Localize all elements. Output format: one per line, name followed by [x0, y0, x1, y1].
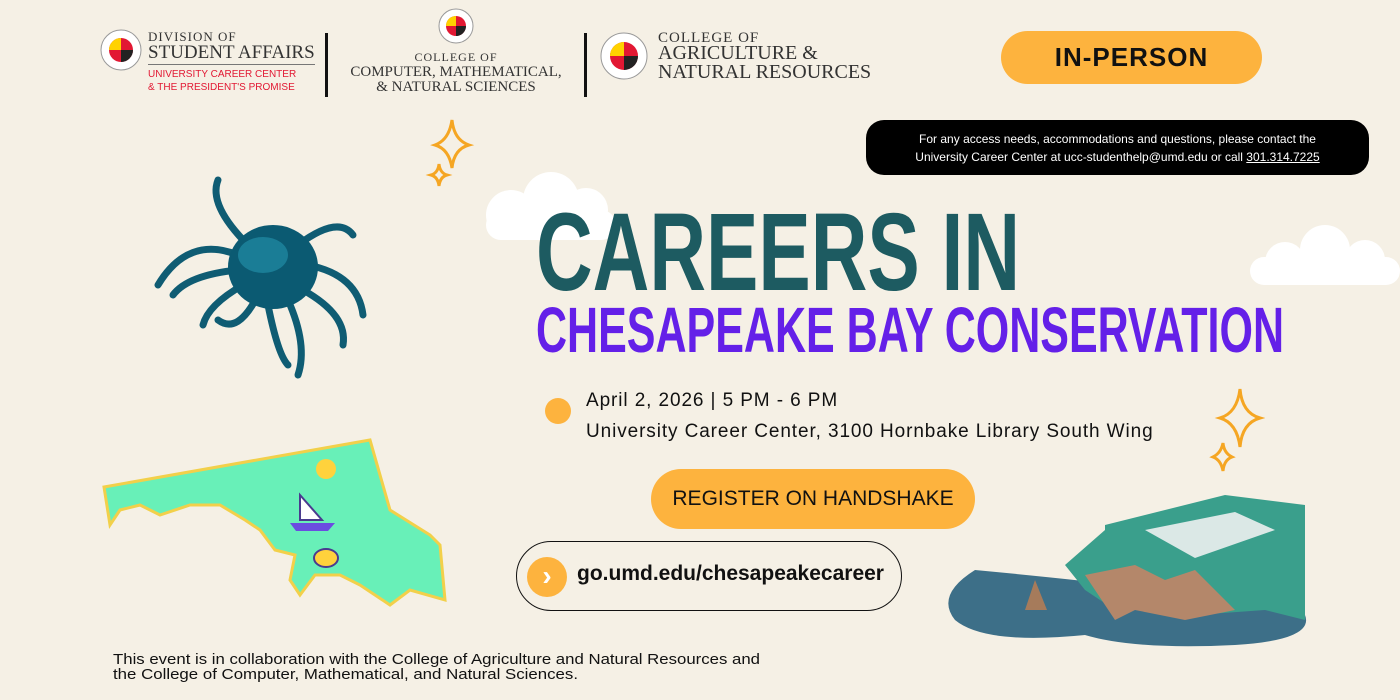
badge: in-person: IN-PERSON [1055, 42, 1208, 72]
logo: division of student affairs: DIVISION OF [148, 29, 237, 44]
icon: orange dot [545, 398, 571, 424]
access info box: University Career Center at ucc-studenthelp@umd.edu or call 301.314.7225 [915, 150, 1320, 164]
access info box: For any access needs, accommodations and questions, please contact the [919, 132, 1316, 146]
logo: college of computer, mathematical & natural sciences: & NATURAL SCIENCES [376, 79, 536, 95]
logo: college of agriculture & natural resources: NATURAL RESOURCES [658, 61, 871, 83]
button: register on handshake: REGISTER ON HANDSHAKE [672, 487, 954, 510]
logo: division of student affairs: UNIVERSITY CAREER CENTER [148, 69, 296, 80]
link pill: go.umd.edu/chesapeakecareer [577, 562, 884, 585]
logo: division of student affairs: & THE PRESIDENT'S PROMISE [148, 82, 295, 93]
illustration: coastal cliff [948, 495, 1306, 646]
button: register on handshake [651, 469, 975, 529]
icon: sparkles top [426, 120, 474, 186]
logo: division of student affairs [100, 29, 315, 93]
event details [586, 390, 1154, 442]
event details: April 2, 2026 | 5 PM - 6 PM [586, 390, 838, 411]
icon: sparkles right [1209, 388, 1265, 472]
icon: arrow circle [527, 557, 567, 597]
event details: University Career Center, 3100 Hornbake Library South Wing [586, 421, 1154, 442]
footer: collaboration note: the College of Computer, Mathematical, and Natural Sciences. [113, 667, 578, 683]
badge: in-person [1001, 31, 1262, 84]
access info box [866, 120, 1369, 175]
logo: college of agriculture & natural resources: COLLEGE OF [658, 30, 759, 46]
logo: college of computer, mathematical & natural sciences: COMPUTER, MATHEMATICAL, [350, 64, 562, 80]
logo: college of agriculture & natural resources [600, 30, 871, 83]
logo: division of student affairs: STUDENT AFFAIRS [148, 42, 315, 63]
clouds [486, 172, 614, 240]
logo: college of computer, mathematical & natural sciences: COLLEGE OF [414, 50, 498, 64]
link pill [516, 541, 902, 611]
footer: collaboration note [113, 652, 760, 683]
icon: arrow circle: › [542, 560, 552, 591]
logo: college of agriculture & natural resources: AGRICULTURE & [658, 42, 818, 64]
logo: college of computer, mathematical & natural sciences [350, 8, 562, 95]
illustration: crab [154, 176, 366, 378]
illustration: maryland map [102, 438, 447, 607]
footer: collaboration note: This event is in collaboration with the College of Agriculture and Natural Resources and [113, 652, 760, 668]
